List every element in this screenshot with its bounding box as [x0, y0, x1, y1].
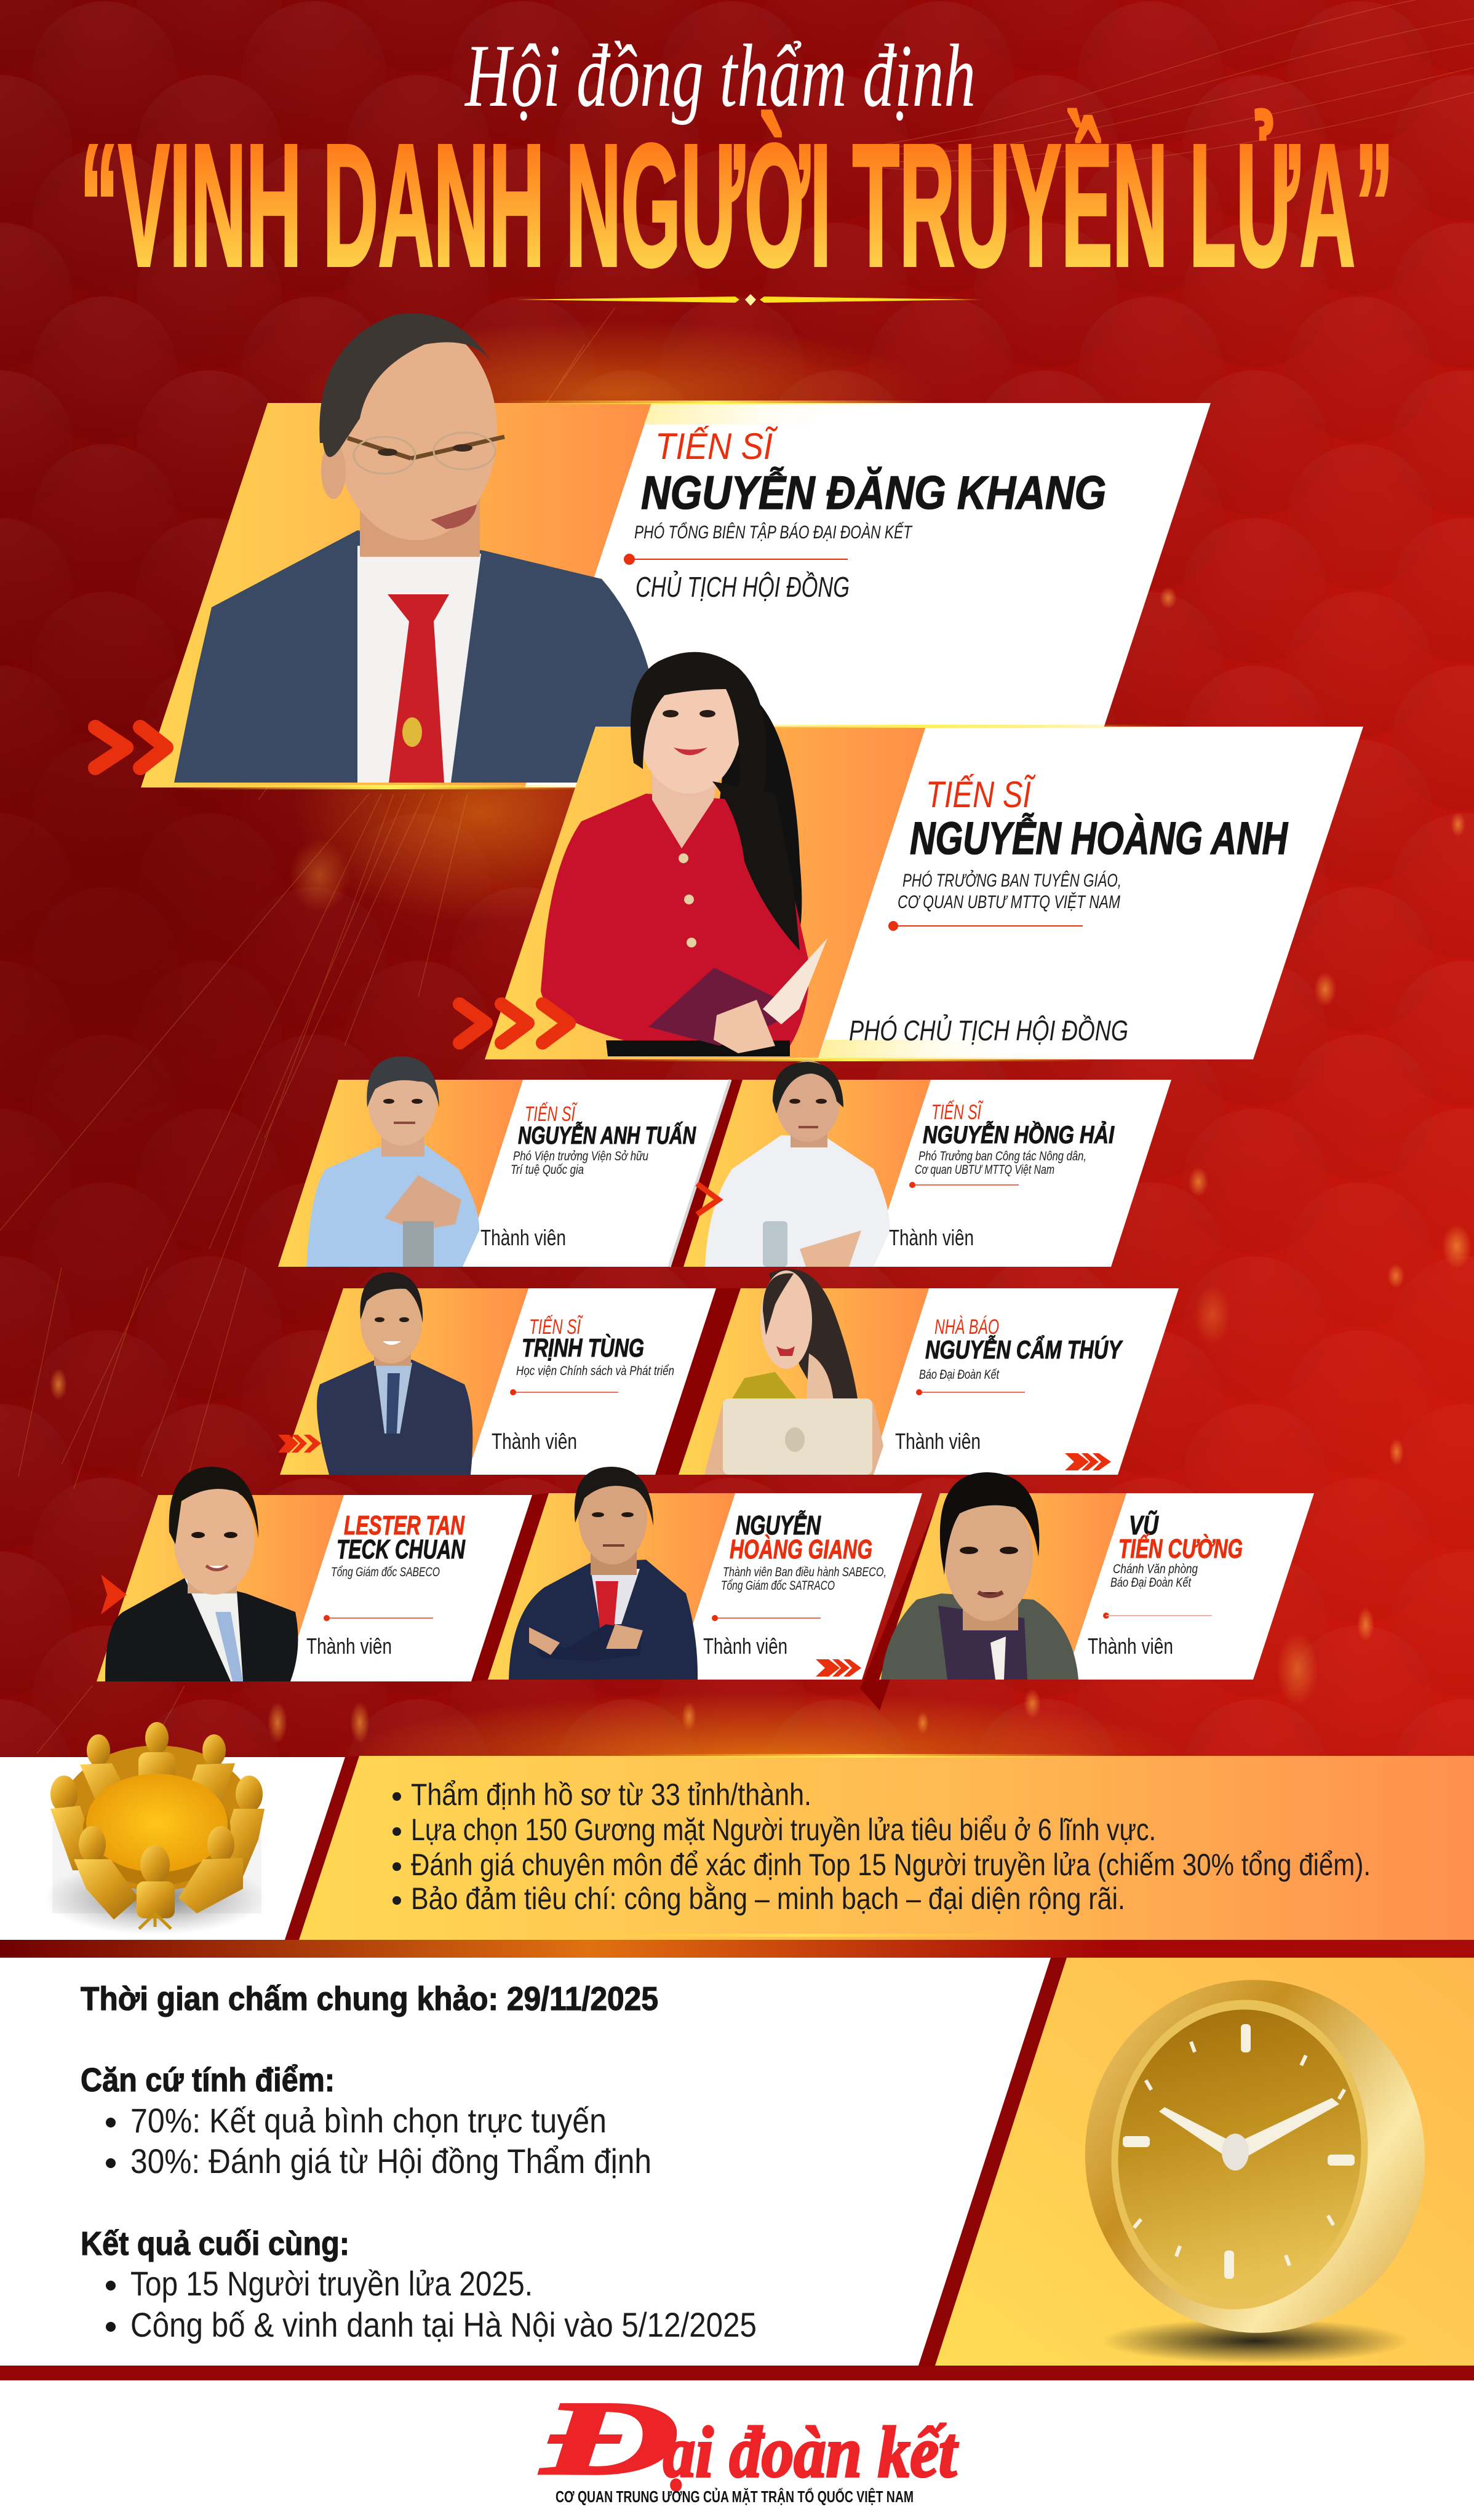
logo: Đại đoàn kết: Đ [540, 2380, 679, 2496]
panel: card Vũ Tiến Cường [879, 1472, 1314, 1680]
text: schedule [81, 1980, 757, 2344]
panel: card vice chair [460, 652, 1363, 1061]
text: vice chair: CƠ QUAN UBTƯ MTTQ VIỆT NAM [898, 892, 1120, 912]
portrait: chairman [174, 313, 652, 783]
text: schedule: Thời gian chấm chung khảo: 29/11/2025 [81, 1980, 658, 2017]
text: duties bullets [392, 1777, 1371, 1916]
text: schedule: Top 15 Người truyền lửa 2025. [130, 2264, 533, 2303]
text: Lester Tan: LESTER TAN [344, 1510, 465, 1541]
text: Hoàng Giang: NGUYỄN [736, 1510, 821, 1541]
logo: Đại đoàn kết [540, 2380, 958, 2496]
text: vice chair: TIẾN SĨ [926, 774, 1036, 815]
panel: card chairman [95, 313, 1211, 789]
text: Cẩm Thúy: Thành viên [895, 1429, 981, 1454]
text: Lester Tan: Thành viên [306, 1633, 392, 1659]
text: Tiến Cường [1088, 1510, 1243, 1659]
text: vice chair [849, 774, 1288, 1047]
panel: card Nguyễn Anh Tuấn [278, 1056, 731, 1267]
text: Hồng Hải: Thành viên [889, 1225, 974, 1250]
text: Hoàng Giang: Thành viên [703, 1633, 787, 1659]
text: duties bullets: Thẩm định hồ sơ từ 33 tỉnh/thành. [411, 1777, 811, 1812]
panel: review duties [0, 1722, 1474, 1940]
portrait: Trịnh Tùng [317, 1272, 472, 1475]
icon: golden round table [44, 1722, 266, 1935]
text: Cẩm Thúy: NGUYỄN CẨM THÚY [925, 1334, 1123, 1364]
portrait: Hồng Hải [705, 1061, 890, 1267]
logo: Đại đoàn kết: ại đoàn kết [663, 2412, 958, 2492]
text: Anh Tuấn: TIẾN SĨ [525, 1102, 578, 1126]
text: logo tagline: CƠ QUAN TRUNG ƯƠNG CỦA MẶT TRẬN TỔ QUỐC VIỆT NAM [556, 2487, 914, 2506]
text: duties bullets: Lựa chọn 150 Gương mặt Người truyền lửa tiêu biểu ở 6 lĩnh vực. [411, 1812, 1156, 1847]
icon: chevrons [95, 727, 166, 768]
text: Hoàng Giang: Thành viên Ban điều hành SABECO, [723, 1565, 886, 1579]
text: Hồng Hải: NGUYỄN HỒNG HẢI [923, 1120, 1115, 1149]
text: Lester Tan: Tổng Giám đốc SABECO [331, 1565, 440, 1579]
text: Trịnh Tùng: TIẾN SĨ [529, 1315, 583, 1339]
panel: card Lester Tan [97, 1467, 532, 1681]
text: chairman: TIẾN SĨ [655, 426, 778, 467]
text: Cẩm Thúy: NHÀ BÁO [934, 1315, 999, 1339]
text: Hồng Hải: Phó Trưởng ban Công tác Nông dân, [918, 1149, 1086, 1163]
portrait: Lester Tan [105, 1467, 298, 1681]
text: Tiến Cường: Chánh Văn phòng [1113, 1562, 1198, 1576]
icon: chevrons [816, 1659, 861, 1677]
text: Trịnh Tùng: Học viện Chính sách và Phát triển [516, 1364, 674, 1378]
text: Cẩm Thúy: Báo Đại Đoàn Kết [919, 1368, 1000, 1382]
footer [0, 2380, 1474, 2520]
icon: chevrons [278, 1435, 321, 1453]
text: vice chair: PHÓ TRƯỞNG BAN TUYÊN GIÁO, [902, 869, 1121, 891]
text: Tiến Cường: VŨ [1129, 1510, 1159, 1541]
text: Hồng Hải: TIẾN SĨ [931, 1101, 984, 1124]
text: Hồng Hải [889, 1101, 1115, 1250]
text: schedule: Kết quả cuối cùng: [81, 2225, 349, 2262]
icon: chevrons [1065, 1453, 1111, 1470]
panel: card Trịnh Tùng [278, 1272, 716, 1475]
portrait: vice chair [541, 652, 827, 1056]
text: Trịnh Tùng: Thành viên [492, 1429, 577, 1454]
text: chairman: CHỦ TỊCH HỘI ĐỒNG [635, 570, 850, 603]
text: chairman: NGUYỄN ĐĂNG KHANG [641, 466, 1106, 519]
text: Lester Tan: TECK CHUAN [337, 1534, 466, 1565]
band: bottom dark strip [0, 2366, 1474, 2380]
decorative dark strips [471, 1080, 952, 1710]
text: vice chair: PHÓ CHỦ TỊCH HỘI ĐỒNG [849, 1014, 1128, 1047]
text: Anh Tuấn: NGUYỄN ANH TUẤN [518, 1121, 696, 1149]
portrait: Cẩm Thúy [704, 1269, 883, 1475]
text: Tiến Cường: Báo Đại Đoàn Kết [1110, 1576, 1192, 1590]
icon: small chevron [697, 1184, 719, 1214]
text: Lester Tan [306, 1510, 466, 1659]
text: Trịnh Tùng [492, 1315, 674, 1454]
panel: card Nguyễn Hoàng Giang [488, 1467, 922, 1680]
text: Anh Tuấn: Phó Viện trưởng Viện Sở hữu [513, 1149, 648, 1163]
text: Anh Tuấn: Thành viên [480, 1225, 566, 1250]
divider: gold ornament [517, 294, 982, 306]
text: Anh Tuấn: Trí tuệ Quốc gia [511, 1163, 584, 1177]
text: Hoàng Giang: Tổng Giám đốc SATRACO [721, 1579, 835, 1593]
portrait: Anh Tuấn [306, 1056, 479, 1267]
text: schedule: Căn cứ tính điểm: [81, 2062, 335, 2099]
text: schedule: 30%: Đánh giá từ Hội đồng Thẩm định [130, 2142, 651, 2180]
icon: chevrons [460, 1004, 569, 1043]
text: Tiến Cường: TIẾN CƯỜNG [1118, 1533, 1243, 1564]
text: Anh Tuấn [480, 1102, 696, 1250]
panel: card Nguyễn Cẩm Thúy [679, 1269, 1179, 1475]
panel: schedule and scoring [0, 1958, 1474, 2366]
band: divider strip [0, 1940, 1474, 1958]
portrait: Hoàng Giang [509, 1467, 698, 1680]
text: vice chair: NGUYỄN HOÀNG ANH [910, 813, 1288, 864]
text: duties bullets: Bảo đảm tiêu chí: công bằng – minh bạch – đại diện rộng rãi. [411, 1881, 1125, 1916]
text: chairman: PHÓ TỔNG BIÊN TẬP BÁO ĐẠI ĐOÀN KẾT [634, 522, 913, 543]
text: Trịnh Tùng: TRỊNH TÙNG [522, 1333, 644, 1362]
text: Cẩm Thúy [895, 1315, 1123, 1454]
text: Tiến Cường: Thành viên [1088, 1633, 1173, 1659]
text: schedule: 70%: Kết quả bình chọn trực tuyến [130, 2101, 607, 2140]
text: Hồng Hải: Cơ quan UBTƯ MTTQ Việt Nam [915, 1163, 1054, 1177]
icon: golden clock [1062, 1958, 1448, 2363]
text: chairman [624, 426, 1106, 603]
text: schedule: Công bố & vinh danh tại Hà Nội vào 5/12/2025 [130, 2305, 757, 2344]
panel: card Nguyễn Hồng Hải [683, 1061, 1171, 1267]
portrait: Tiến Cường [881, 1472, 1078, 1680]
text: Hoàng Giang: HOÀNG GIANG [730, 1534, 872, 1565]
icon: arrowhead [101, 1574, 127, 1614]
title: Hội đồng thẩm định: Hội đồng thẩm định [464, 26, 976, 126]
text: Hoàng Giang [703, 1510, 886, 1659]
